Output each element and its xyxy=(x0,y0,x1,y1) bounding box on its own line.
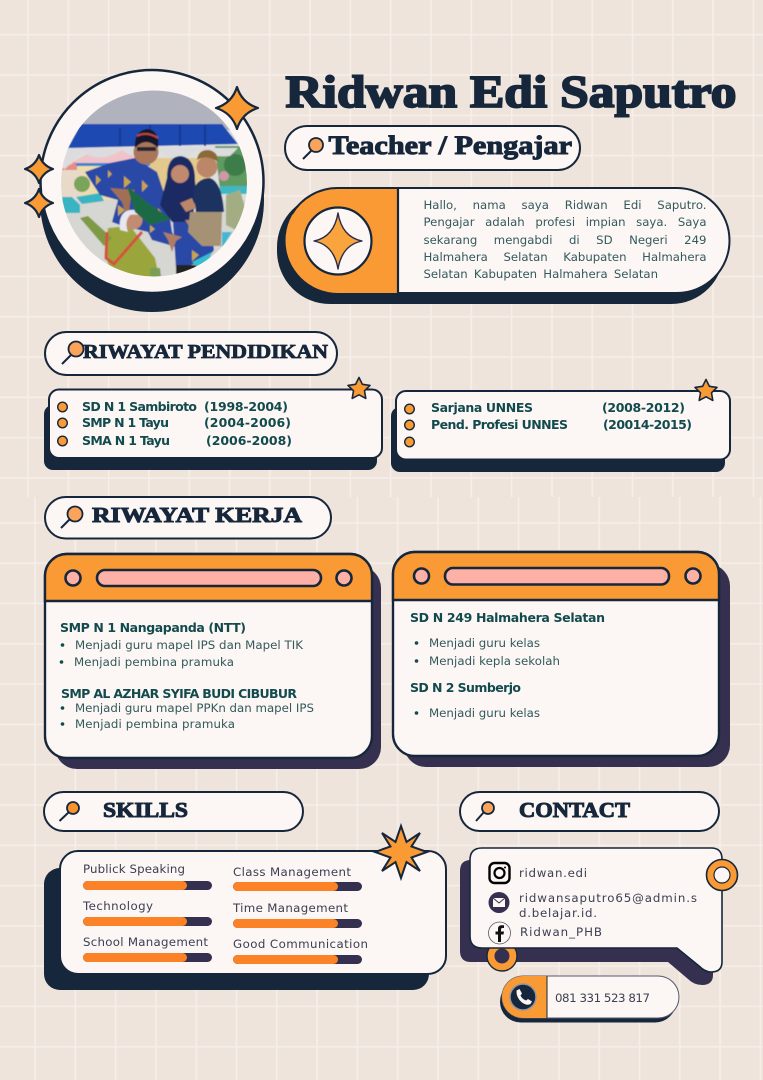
skill: Publick Speaking: Publick Speaking xyxy=(83,862,185,876)
heading: contact: CONTACT xyxy=(519,798,630,822)
skill: Time Management xyxy=(232,901,362,928)
skill: School Management: School Management xyxy=(83,935,208,949)
icon: magnifier xyxy=(60,802,79,821)
bullets xyxy=(405,404,414,447)
icon: star xyxy=(348,378,370,398)
woman xyxy=(160,156,196,222)
job: SD N 249: Menjadi guru kelas xyxy=(429,636,540,650)
panel: about me xyxy=(277,188,730,304)
skill: Class Management xyxy=(233,865,362,891)
icon: magnifier xyxy=(476,802,494,821)
panel: phone pill xyxy=(500,976,679,1022)
photo: family portrait xyxy=(61,90,247,276)
icon: instagram xyxy=(490,863,510,883)
panel: work history right xyxy=(393,552,730,767)
job: SD N 249: SD N 249 Halmahera Selatan xyxy=(410,610,605,625)
icon: sparkle left lower xyxy=(25,189,53,217)
icon: facebook xyxy=(488,922,510,944)
education entries: SMP N 1 Tayu xyxy=(82,415,169,430)
icon: magnifier xyxy=(303,138,323,159)
heading: skills xyxy=(44,792,303,831)
skill: Technology xyxy=(82,899,212,926)
job: SMP N 1 Nangapanda: SMP N 1 Nangapanda (NTT) xyxy=(60,620,246,635)
email address: ridwansaputro65@admin.s xyxy=(519,891,697,905)
panel: education left xyxy=(44,378,382,470)
job: SMP Al Azhar: Menjadi guru mapel PPKn dan mapel IPS xyxy=(75,701,314,715)
title: Ridwan Edi Saputro xyxy=(286,66,736,117)
education entries: (2004-2006) xyxy=(204,415,291,430)
heading: riwayat pendidikan: RIWAYAT PENDIDIKAN xyxy=(83,342,328,363)
icon: sparkle left upper xyxy=(25,155,53,183)
job: SMP Al Azhar xyxy=(61,686,314,731)
skill: Good Communication xyxy=(233,937,368,964)
panel: work history left xyxy=(45,554,381,769)
icon: mail xyxy=(488,892,510,913)
bullets xyxy=(58,402,67,446)
ring: right xyxy=(706,860,738,890)
email address: d.belajar.id. xyxy=(519,906,597,920)
skill: Technology: Technology xyxy=(82,899,153,913)
icon: star xyxy=(695,380,717,400)
icon: sparkle badge xyxy=(304,208,372,274)
education entries: Sarjana UNNES xyxy=(431,400,533,415)
job: SMP Al Azhar: SMP AL AZHAR SYIFA BUDI CIBUBUR xyxy=(61,686,297,701)
job: SD N 2 Sumberjo: Menjadi guru kelas xyxy=(429,706,540,720)
job: SMP N 1 Nangapanda xyxy=(60,620,303,669)
heading: riwayat kerja: RIWAYAT KERJA xyxy=(92,503,303,527)
panel: education right xyxy=(391,380,730,472)
education entries: (2008-2012) xyxy=(602,400,685,415)
profile photo frame xyxy=(40,70,264,312)
skill: School Management xyxy=(83,935,212,962)
about text: sekarang mengabdi di SD Negeri 249 xyxy=(424,233,706,247)
job: SMP Al Azhar: Menjadi pembina pramuka xyxy=(75,717,235,731)
icon: magnifier xyxy=(62,342,84,364)
subtitle text: Teacher / Pengajar xyxy=(328,131,572,160)
facebook handle: Ridwan_PHB xyxy=(520,925,602,939)
skill: Good Communication: Good Communication xyxy=(233,937,368,951)
instagram handle: ridwan.edi xyxy=(519,866,587,880)
panel: contact card xyxy=(460,848,738,985)
education entries: SMA N 1 Tayu xyxy=(82,433,170,448)
skill: Publick Speaking xyxy=(83,862,212,890)
girl xyxy=(106,226,158,276)
icon: phone xyxy=(510,984,536,1010)
education entries: (2006-2008) xyxy=(206,433,292,448)
job: SD N 2 Sumberjo: SD N 2 Sumberjo xyxy=(410,680,521,695)
boy xyxy=(196,156,218,178)
about text: Selatan Kabupaten Halmahera Selatan xyxy=(424,267,658,281)
man xyxy=(85,158,180,248)
job: SMP N 1 Nangapanda: Menjadi guru mapel IPS dan Mapel TIK xyxy=(75,638,303,652)
icon: eight-point burst xyxy=(375,826,427,878)
ring: lower xyxy=(487,941,517,971)
education entries: (1998-2004) xyxy=(204,399,288,414)
email address xyxy=(519,891,697,920)
job: SMP N 1 Nangapanda: Menjadi pembina pramuka xyxy=(74,655,234,669)
phone number: 081 331 523 817 xyxy=(555,991,650,1005)
heading: riwayat kerja xyxy=(45,497,331,538)
heading: skills: SKILLS xyxy=(103,798,188,822)
job: SD N 249 xyxy=(410,610,605,668)
heading: riwayat pendidikan xyxy=(45,332,337,375)
about text: Halmahera Selatan Kabupaten Halmahera xyxy=(424,250,706,264)
window header xyxy=(393,552,719,600)
job: SD N 2 Sumberjo xyxy=(410,680,540,720)
icon: sparkle top right of photo xyxy=(216,87,258,129)
icon: magnifier xyxy=(61,506,82,528)
skill: Class Management: Class Management xyxy=(233,865,351,879)
education entries: SD N 1 Sambiroto xyxy=(82,399,197,414)
heading: contact xyxy=(460,792,719,831)
education entries xyxy=(431,400,692,432)
skill: Time Management: Time Management xyxy=(232,901,348,915)
window header xyxy=(45,554,372,601)
about text: Hallo, nama saya Ridwan Edi Saputro. xyxy=(424,198,706,212)
subtitle pill xyxy=(285,126,580,170)
education entries xyxy=(82,399,292,448)
education entries: (20014-2015) xyxy=(603,417,692,432)
job: SD N 249: Menjadi kepla sekolah xyxy=(429,654,560,668)
about text xyxy=(424,197,708,287)
panel: skills xyxy=(44,826,446,990)
education entries: Pend. Profesi UNNES xyxy=(431,417,568,432)
about text: Pengajar adalah profesi impian saya. Saya xyxy=(424,215,706,229)
